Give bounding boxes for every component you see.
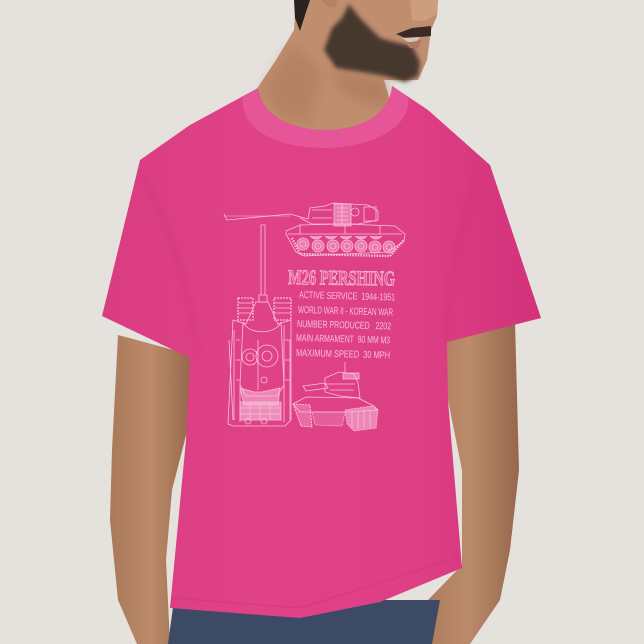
top view tank [228, 225, 291, 426]
side view tank [224, 203, 405, 256]
spec: number produced: NUMBER PRODUCED 2202 [297, 319, 391, 332]
t-shirt body and sleeves [102, 86, 541, 618]
tank print [224, 203, 405, 431]
spec: active service: ACTIVE SERVICE 1944-1951 [299, 290, 395, 304]
teeth [402, 37, 420, 42]
title: M26 PERSHING [288, 265, 395, 290]
spec list [296, 290, 395, 361]
jeans [168, 600, 440, 644]
head and neck [256, 0, 438, 135]
collar [243, 86, 408, 148]
sleeve seam shadows [142, 168, 480, 356]
three quarter view tank [293, 362, 378, 431]
beard [324, 4, 420, 82]
left arm [110, 335, 192, 644]
nose [410, 0, 438, 21]
spec: war: WORLD WAR II - KOREAN WAR [298, 305, 393, 318]
hair [294, 0, 310, 31]
hem shadow [171, 558, 458, 608]
right arm [418, 322, 519, 644]
spec: maximum speed: MAXIMUM SPEED 30 MPH [296, 348, 390, 361]
lower lip [406, 40, 422, 48]
neck shadow [262, 45, 322, 125]
moustache [396, 26, 431, 38]
spec: main armament: MAIN ARMAMENT 90 MM M3 [296, 333, 390, 346]
ear [322, 0, 338, 8]
under chin shadow [330, 70, 390, 110]
